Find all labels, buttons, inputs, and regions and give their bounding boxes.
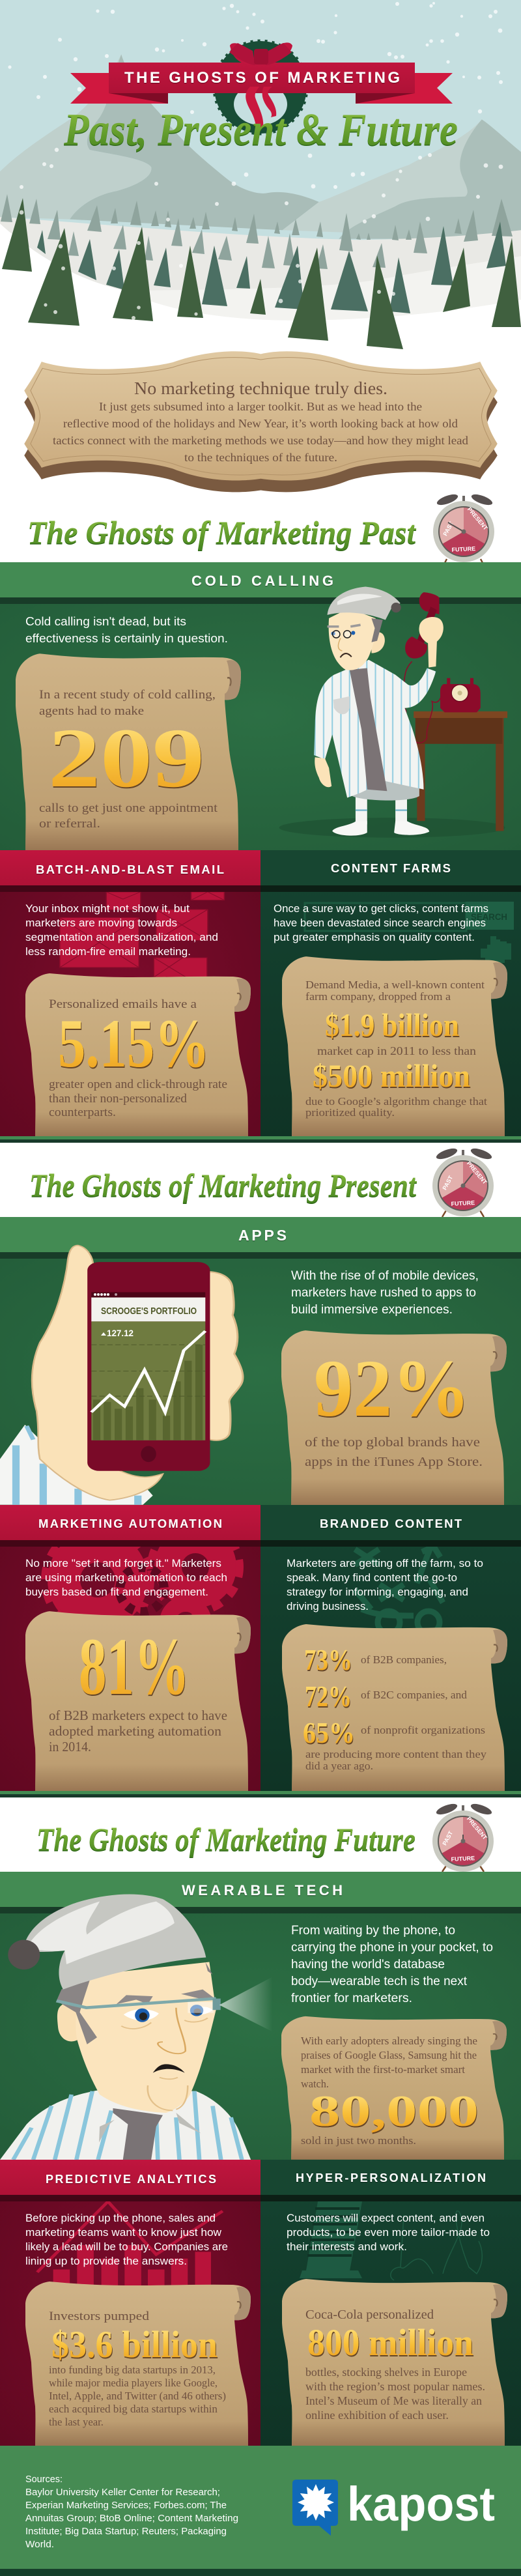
title lockup: wreath and ribbon <box>63 41 458 155</box>
intro text: speak. Many find content the go-to <box>287 1571 457 1584</box>
panel body <box>0 604 521 850</box>
sources <box>25 2474 238 2550</box>
intro text: driving business. <box>287 1600 369 1612</box>
big number 209: 209 <box>48 711 204 805</box>
floor shadow <box>279 818 505 838</box>
intro text: Marketers are getting off the farm, so to <box>287 1557 483 1569</box>
search box icon <box>305 902 514 963</box>
big number 81%: 81% <box>79 1622 190 1712</box>
scroll text: of the top global brands have <box>305 1435 480 1450</box>
camera <box>213 1999 221 2010</box>
panel: predictive analytics <box>0 2160 260 2446</box>
stat: 72%: 72% <box>305 1680 352 1713</box>
kapost logo <box>292 2477 495 2536</box>
scroll <box>282 1624 507 1791</box>
intro text: their interests and work. <box>287 2240 407 2253</box>
clock: present <box>432 1147 494 1217</box>
header <box>260 1505 521 1540</box>
nose <box>158 2008 186 2054</box>
scroll text <box>49 2364 226 2428</box>
shadow stripe <box>260 1540 521 1547</box>
ribbon tails falling <box>246 87 263 130</box>
clock: future: PRESENT <box>466 1816 488 1841</box>
phone status bar <box>91 1292 205 1298</box>
title: PREDICTIVE ANALYTICS <box>46 2173 216 2186</box>
sources: Institute; Big Data Startup; Reuters; Packaging <box>25 2526 227 2537</box>
title: BRANDED CONTENT <box>320 1517 462 1530</box>
scroll text: praises of Google Glass, Samsung hit the <box>301 2049 477 2061</box>
panel body <box>0 1259 521 1505</box>
sign plank <box>24 351 498 492</box>
intro text: segmentation and personalization, and <box>25 931 218 943</box>
sign body text <box>53 400 468 464</box>
scroll <box>25 2282 251 2446</box>
phone title: SCROOGE'S PORTFOLIO <box>101 1306 197 1317</box>
scroll text: market with the first-to-market smart <box>301 2063 465 2076</box>
title line one: THE GHOSTS OF MARKETING <box>124 69 400 87</box>
nightcap <box>328 587 401 620</box>
front row of trees <box>2 198 521 349</box>
intro text: lining up to provide the answers. <box>25 2255 187 2267</box>
heading: present: The Ghosts of Marketing Present <box>29 1167 417 1203</box>
bar chart icon <box>37 2201 223 2289</box>
phone ticker: 127.12 <box>107 1328 134 1338</box>
intro text: build immersive experiences. <box>291 1303 453 1317</box>
sign headline: No marketing technique truly dies. <box>134 379 387 398</box>
banner <box>0 1217 521 1252</box>
panel: branded content <box>260 1505 521 1791</box>
phone screen header <box>91 1298 205 1321</box>
nightcap <box>23 1895 206 1990</box>
glass prism <box>188 2002 214 2013</box>
scroll text: or referral. <box>39 817 100 831</box>
chart bars <box>93 1345 203 1440</box>
falling snow <box>8 2 503 320</box>
sources: World. <box>25 2539 54 2550</box>
scroll <box>16 653 241 850</box>
scroll text: prioritized quality. <box>305 1106 395 1119</box>
banner shadow stripe <box>0 1907 521 1913</box>
sky <box>0 0 521 326</box>
wooden sign intro <box>24 351 498 492</box>
clock: past: FUTURE <box>451 545 475 553</box>
intro text <box>274 902 488 943</box>
intro text: effectiveness is certainly in question. <box>25 632 228 645</box>
smart glasses band <box>57 1999 216 2008</box>
title line two: Past, Present & Future <box>63 105 458 155</box>
wreath <box>214 41 307 134</box>
clock: past <box>433 493 494 568</box>
mountains <box>0 54 521 326</box>
intro text: strategy for informing, engaging, and <box>287 1586 468 1598</box>
scroll text: than their non-personalized <box>49 1092 188 1106</box>
header <box>260 850 521 885</box>
scroll <box>25 1611 251 1791</box>
mouth <box>153 2064 185 2073</box>
envelope icons <box>60 892 224 977</box>
section: wearable tech <box>0 1872 521 2160</box>
heading: future: The Ghosts of Marketing Future <box>36 1821 415 1857</box>
scroll text: bottles, stocking shelves in Europe <box>305 2366 467 2379</box>
stat: 72% <box>305 1680 467 1713</box>
middle row of trees <box>37 222 506 313</box>
panel: marketing automation <box>0 1505 260 1791</box>
scroll <box>282 2279 507 2446</box>
scroll text lead: Investors pumped <box>49 2310 150 2323</box>
scroll text: In a recent study of cold calling, <box>39 688 216 702</box>
banner shadow stripe <box>0 597 521 604</box>
scroll text: are producing more content than they <box>305 1748 487 1760</box>
scroll text <box>301 2035 477 2147</box>
header <box>0 2160 260 2195</box>
sewing machine icon <box>300 2201 482 2280</box>
banner <box>0 562 521 597</box>
scroll text: watch. <box>301 2078 329 2090</box>
table <box>414 711 507 831</box>
header <box>0 850 260 885</box>
stat: 73%: 73% <box>304 1643 352 1676</box>
intro text: are using marketing automation to reach <box>25 1571 227 1584</box>
phone chart screen <box>91 1321 205 1440</box>
clock: future <box>432 1802 494 1872</box>
scroll text: the last year. <box>49 2416 104 2428</box>
big number 92%: 92% <box>314 1344 470 1434</box>
legs and socks <box>332 794 429 836</box>
phone home button <box>141 1446 156 1462</box>
footer <box>0 2446 521 2576</box>
scroll text: adopted marketing automation <box>49 1723 222 1739</box>
shadow stripe <box>260 2195 521 2201</box>
title: BATCH-AND-BLAST EMAIL <box>36 863 224 876</box>
shadow stripe <box>260 885 521 892</box>
intro text <box>291 1269 479 1317</box>
sources: Annuitas Group; BtoB Online; Content Marketing <box>25 2513 238 2524</box>
face creases <box>121 2018 208 2111</box>
scroll <box>25 973 251 1136</box>
intro text: From waiting by the phone, to <box>291 1924 455 1938</box>
intro text <box>25 902 218 958</box>
header <box>260 2160 521 2195</box>
clock: future: PAST <box>441 1830 454 1846</box>
title: HYPER-PERSONALIZATION <box>296 2171 486 2184</box>
shirt cuff <box>0 1425 153 1505</box>
sign body text: tactics connect with the marketing methods we use today—and how they might lead <box>53 434 468 447</box>
intro text: No more "set it and forget it." Marketers <box>25 1557 221 1569</box>
intro text: Once a sure way to get clicks, content farms <box>274 902 488 915</box>
sources: Experian Marketing Services; Forbes.com; The <box>25 2500 227 2511</box>
intro text: carrying the phone in your pocket, to <box>291 1941 493 1954</box>
clock: past: PRESENT <box>466 506 489 532</box>
pocket <box>333 696 350 714</box>
receiver <box>405 592 439 659</box>
hair <box>371 618 383 642</box>
section title: APPS <box>238 1227 287 1244</box>
sources: Baylor University Keller Center for Research; <box>25 2487 220 2498</box>
clock: future: FUTURE <box>451 1855 475 1863</box>
scroll text: due to Google’s algorithm change that <box>305 1095 487 1108</box>
scroll text <box>305 2366 485 2422</box>
status dots <box>94 1293 117 1296</box>
panel: batch-and-blast email <box>0 850 260 1136</box>
search box icon: SEARCH <box>471 911 507 922</box>
stat: 800 million: 800 million <box>307 2321 473 2364</box>
scroll text <box>305 979 487 1119</box>
face details <box>328 625 361 657</box>
panel: content farms <box>260 850 521 1136</box>
header winter scene <box>0 0 521 349</box>
banner <box>0 1872 521 1907</box>
intro text: Before picking up the phone, sales and <box>25 2212 216 2224</box>
scroll text: did a year ago. <box>305 1760 373 1772</box>
palm and thumb <box>32 1246 163 1500</box>
shadow stripe <box>0 2195 260 2201</box>
projection beam <box>219 1977 272 2032</box>
intro text: frontier for marketers. <box>291 1992 412 2005</box>
illustration: hand holding phone <box>0 1246 243 1505</box>
scroll text <box>39 688 218 831</box>
face <box>76 1962 216 2113</box>
nightcap folds <box>27 1902 175 1964</box>
intro text <box>25 1557 227 1598</box>
brows <box>117 1990 214 2004</box>
panel row: predictive analytics and hyper-personalization <box>0 2160 521 2446</box>
scroll text <box>305 1435 483 1469</box>
desk phone <box>440 678 481 712</box>
scroll text: while major media players like Google, <box>49 2377 218 2389</box>
pajama bottom <box>352 775 419 801</box>
scroll <box>281 1330 507 1505</box>
stat: $500 million: $500 million <box>313 1057 470 1094</box>
intro text: marketers are moving towards <box>25 917 177 929</box>
banner shadow stripe <box>0 1252 521 1259</box>
intro text <box>25 615 228 645</box>
illustration: old man on the phone <box>279 587 507 838</box>
shirt <box>0 2090 251 2160</box>
stat: 73% <box>304 1643 447 1676</box>
scroll text: with the region’s most popular names. <box>305 2380 485 2393</box>
scroll text <box>49 1708 227 1754</box>
title: MARKETING AUTOMATION <box>38 1517 222 1530</box>
scroll text: calls to get just one appointment <box>39 801 218 815</box>
stat: 65%: of nonprofit organizations <box>361 1724 485 1736</box>
chart grid <box>91 1345 205 1396</box>
shadow stripe <box>0 885 260 892</box>
scroll text: market cap in 2011 to less than <box>317 1044 476 1057</box>
clock: present: FUTURE <box>451 1199 475 1207</box>
playbook icon <box>355 1547 443 1633</box>
stat: 65% <box>303 1716 485 1749</box>
intro text: likely a lead will be to buy. Companies are <box>25 2240 228 2253</box>
pompom <box>8 1940 40 1969</box>
heading: past: The Ghosts of Marketing Past <box>27 514 417 551</box>
footer background <box>0 2446 521 2569</box>
phone cord <box>402 661 442 743</box>
scroll text <box>305 1748 487 1772</box>
scroll text: sold in just two months. <box>301 2134 416 2147</box>
scroll text: farm company, dropped from a <box>305 990 451 1003</box>
intro text <box>25 2212 228 2267</box>
scroll <box>282 956 507 1136</box>
ribbon band <box>109 63 415 93</box>
pompom <box>391 603 401 612</box>
illustration: man wearing smart glasses <box>0 1895 272 2160</box>
scroll text: in 2014. <box>49 1739 91 1754</box>
panel row: batch-and-blast email and content farms <box>0 850 521 1143</box>
intro text: put greater emphasis on quality content. <box>274 931 475 943</box>
stat: 65%: 65% <box>303 1716 355 1749</box>
chart line <box>91 1331 205 1412</box>
section title: COLD CALLING <box>191 573 333 589</box>
phone body <box>87 1262 210 1471</box>
footer bottom stripe <box>0 2569 521 2576</box>
stat: 72%: of B2C companies, and <box>361 1689 467 1701</box>
intro text <box>291 1924 493 2005</box>
intro text: less random-fire email marketing. <box>25 945 191 958</box>
intro text: buyers based on fit and engagement. <box>25 1586 208 1598</box>
intro text: With the rise of of mobile devices, <box>291 1269 479 1283</box>
logo icon <box>292 2480 338 2536</box>
scroll text lead: Coca-Cola personalized <box>305 2308 434 2322</box>
intro text: Your inbox might not show it, but <box>25 902 190 915</box>
panel: hyper-personalization <box>260 2160 521 2446</box>
scroll text: online exhibition of each user. <box>305 2409 449 2422</box>
intro text <box>287 1557 483 1612</box>
scroll text: counterparts. <box>49 1106 116 1119</box>
closing stripes <box>0 1136 521 1143</box>
intro text: products, to be even more tailor-made to <box>287 2226 490 2239</box>
big number 5.15%: 5.15% <box>58 1005 210 1081</box>
intro text: marketers have rushed to apps to <box>291 1286 476 1300</box>
undershirt <box>113 2108 163 2160</box>
bow <box>229 42 292 65</box>
panel body <box>0 1913 521 2160</box>
stat: $1.9 billion: $1.9 billion <box>325 1007 459 1043</box>
ear <box>57 2002 78 2041</box>
title: CONTENT FARMS <box>331 861 451 875</box>
panel row: marketing automation and branded content <box>0 1505 521 1797</box>
raised hand <box>419 617 444 667</box>
stat: $3.6 billion: $3.6 billion <box>51 2323 218 2366</box>
scroll <box>281 2016 507 2160</box>
shadow stripe <box>0 1540 260 1547</box>
scroll text: Personalized emails have a <box>49 997 197 1011</box>
scroll text: With early adopters already singing the <box>301 2035 477 2047</box>
intro text <box>287 2212 490 2253</box>
stat: 73%: of B2B companies, <box>361 1653 447 1666</box>
undershirt <box>350 668 387 791</box>
clock: past: PAST <box>442 521 455 537</box>
night robe <box>314 660 436 797</box>
logo wordmark: kapost <box>347 2477 495 2531</box>
section title: WEARABLE TECH <box>182 1882 343 1898</box>
scroll text: agents had to make <box>39 704 144 718</box>
section: apps <box>0 1217 521 1505</box>
section: cold calling <box>0 562 521 850</box>
sign body text: It just gets subsumed into a larger toolkit. But as we head into the <box>99 400 422 413</box>
scroll text: of B2B marketers expect to have <box>49 1708 227 1723</box>
left hand <box>315 757 331 787</box>
clock: present: PAST <box>441 1175 454 1191</box>
intro text: have been devastated since search engines <box>274 917 486 929</box>
big number 80,000: 80,000 <box>309 2086 479 2136</box>
scroll text: greater open and click-through rate <box>49 1078 227 1091</box>
head <box>371 632 385 653</box>
intro text: marketing teams want to know just how <box>25 2226 222 2239</box>
scroll text: Intel, Apple, and Twitter (and 46 others) <box>49 2390 226 2402</box>
intro text: Customers will expect content, and even <box>287 2212 485 2224</box>
scroll text: each acquired big data startups within <box>49 2403 218 2415</box>
intro text: having the world's database <box>291 1958 445 1971</box>
header <box>0 1505 260 1540</box>
ribbon tails <box>70 73 168 104</box>
closing stripes <box>0 1791 521 1797</box>
sign body text: reflective mood of the holidays and New Year, it’s worth looking back at how old <box>63 417 458 430</box>
scroll text: into funding big data startups in 2013, <box>49 2364 216 2376</box>
gear icons <box>46 1523 240 1640</box>
sources: Sources: <box>25 2474 63 2485</box>
intro text: Cold calling isn't dead, but its <box>25 615 186 628</box>
clock: present: PRESENT <box>466 1160 488 1186</box>
scroll text: Intel’s Museum of Me was literally an <box>305 2394 482 2407</box>
back row of trees <box>1 194 513 269</box>
intro text: body—wearable tech is the next <box>291 1975 468 1988</box>
scroll text: Demand Media, a well-known content <box>305 979 485 991</box>
hair <box>57 1979 97 2044</box>
sign body text: to the techniques of the future. <box>184 451 337 464</box>
scroll text: apps in the iTunes App Store. <box>305 1455 483 1469</box>
eyes <box>124 2005 213 2022</box>
fingers <box>206 1272 243 1440</box>
scroll text <box>49 997 227 1119</box>
